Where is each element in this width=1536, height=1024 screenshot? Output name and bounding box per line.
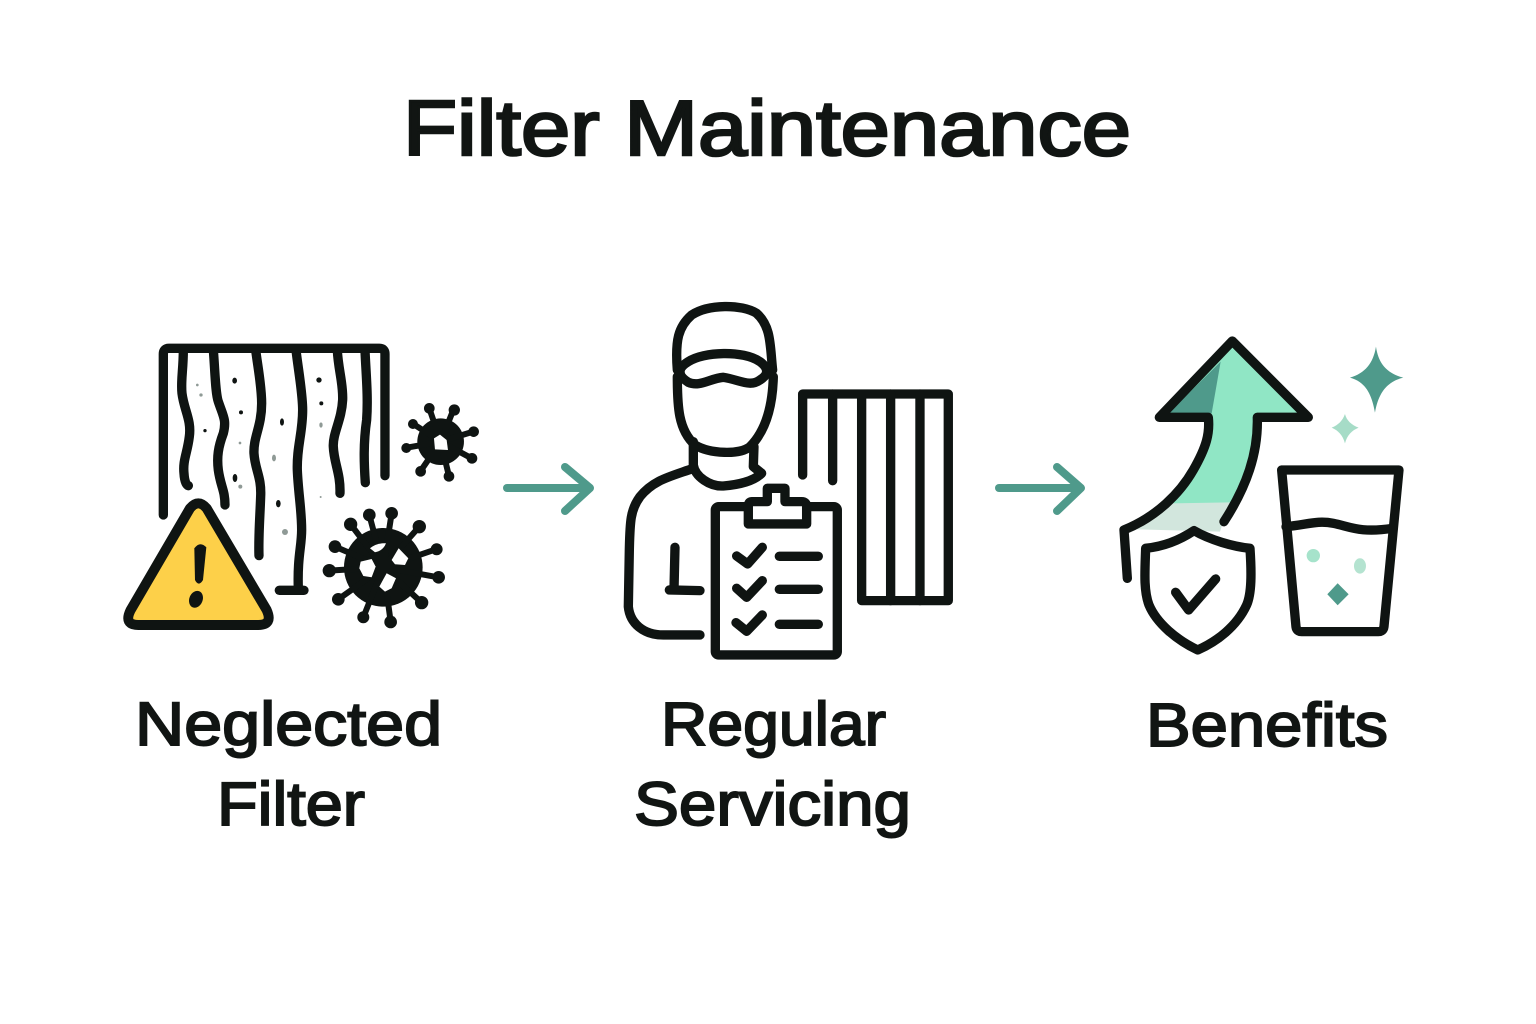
icon: clogged filter [163, 348, 385, 590]
icon: checklist clipboard [715, 488, 837, 655]
icon: shield with check [1145, 531, 1251, 650]
icon: large virus [323, 507, 445, 628]
icon: glass of water [1282, 470, 1399, 632]
icon: upward arrow [1124, 341, 1308, 578]
title: Filter Maintenance [403, 84, 1131, 172]
label: Neglected Filter: Neglected [135, 690, 442, 758]
icon: technician [628, 307, 773, 635]
icon: replacement filter [803, 394, 948, 601]
panel: benefits [1124, 341, 1403, 759]
label: Neglected Filter [135, 690, 442, 838]
label: Regular Servicing: Servicing [634, 770, 911, 838]
label: Regular Servicing: Regular [661, 690, 886, 758]
label: Benefits: Benefits [1146, 691, 1388, 759]
label: Regular Servicing [634, 690, 911, 838]
icon: sparkles [1332, 347, 1403, 443]
icon: warning triangle [128, 503, 269, 625]
panel: regular servicing [628, 307, 948, 838]
icon: small virus [401, 403, 479, 482]
label: Neglected Filter: Filter [217, 770, 365, 838]
arrow: neglected to servicing [507, 467, 590, 511]
arrow: servicing to benefits [999, 467, 1081, 511]
panel: neglected filter [128, 348, 479, 838]
